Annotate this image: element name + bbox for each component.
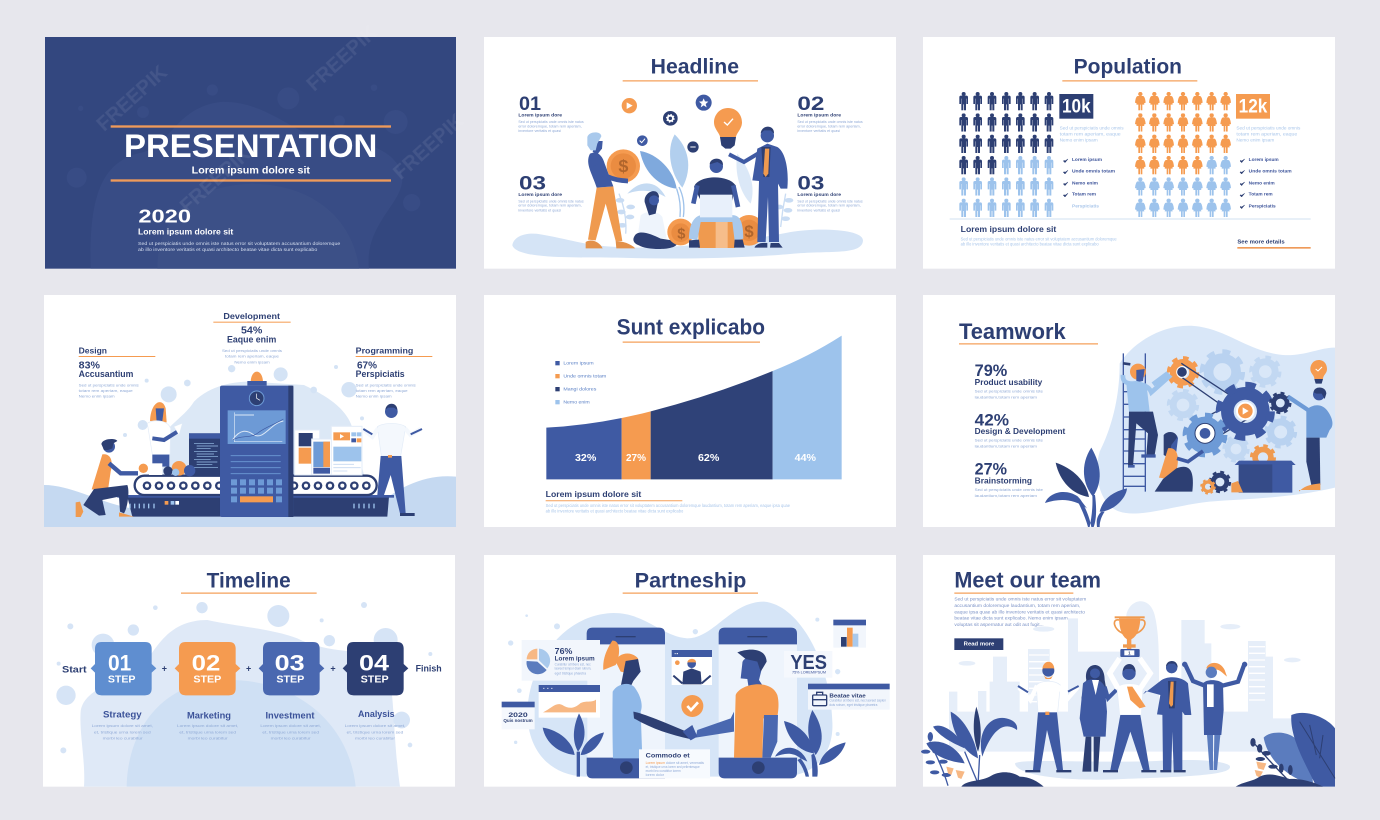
figure: man	[683, 650, 779, 758]
checklist right: Unde omnis totam	[1249, 169, 1292, 174]
icon: coins: $	[744, 222, 754, 241]
figure: man raising trophy	[1103, 658, 1156, 772]
illustration: plants	[543, 710, 846, 777]
checklist left	[1063, 157, 1115, 208]
panel: population	[923, 37, 1335, 269]
step 01	[91, 642, 156, 695]
stat: 10k: Sed ut perspiciatis unde omnis	[1060, 126, 1124, 131]
watermarks: FREEPIK	[93, 61, 172, 136]
card: yes: 75% LOREMIPSUM	[792, 671, 826, 675]
cover title block	[111, 125, 391, 182]
card: commodo et: Lorem ipsum dolore sit amet, venenatis	[646, 760, 704, 765]
label: design: Sed ut perspiciatis unde omnis	[79, 383, 139, 388]
item 03 left: 03	[519, 173, 546, 194]
stat: brainstorming: Sed ut perspiciatis unde omnis iste	[975, 487, 1044, 492]
item 02: error doloremque, totam rem aperiam,	[797, 123, 861, 128]
label: development: Sed ut perspiciatis unde omnis	[222, 348, 282, 353]
label: development: totam rem aperiam, eaque	[225, 353, 280, 358]
item 03 right: Lorem ipsum dore	[797, 192, 841, 198]
figure: woman with tablet	[147, 402, 182, 454]
item 01: error doloremque, totam rem aperiam,	[518, 123, 582, 128]
heading	[623, 55, 758, 82]
checklist left: Totam rem	[1072, 192, 1096, 197]
card: pie stat: eget tristique pharetra	[555, 670, 587, 675]
icon grid: 10k men	[959, 92, 1053, 217]
label: programming	[356, 345, 432, 399]
link: see more details: See more details	[1237, 240, 1285, 246]
checklist right	[1240, 157, 1292, 209]
card: beatae vitae	[808, 684, 890, 710]
heading: Population	[1074, 55, 1182, 79]
watermarks: FREEPIK	[389, 109, 469, 184]
legend	[555, 361, 607, 404]
background blob	[1097, 326, 1335, 514]
cover date text: ab illo inventore veritatis et quasi architecto beatae vitae dicta sunt explicabo	[138, 247, 318, 252]
step text: marketing	[177, 710, 238, 741]
card: commodo et: Commodo et	[646, 753, 691, 760]
start and finish labels: +	[162, 664, 167, 674]
legend: Mangi dolores	[563, 387, 596, 392]
icon: check badge	[681, 695, 703, 717]
item 02: Lorem ipsum dore	[797, 113, 841, 119]
item 03 left	[518, 173, 584, 212]
item 03 left: Sed ut perspiciatis unde omnis iste natus	[518, 198, 584, 203]
checklist left: Perspiciatis	[1072, 203, 1100, 208]
card: pie stat: 76%	[555, 647, 572, 656]
start and finish labels: Finish	[416, 663, 442, 673]
item 03 right: 03	[797, 173, 825, 194]
card: pie stat: laoreet tempor diam rutrum,	[555, 666, 591, 671]
illustration: left plants	[921, 707, 1044, 787]
step text: investment: et, tristique urna lorem sed	[262, 729, 319, 734]
label: design: Design	[79, 345, 107, 355]
cover title block: PRESENTATION	[124, 127, 377, 164]
label: programming: Perspiciatis	[356, 369, 405, 379]
footer text: Lorem ipsum dolore sit	[961, 224, 1056, 234]
item 03 left: error doloremque, totam rem aperiam,	[518, 203, 582, 208]
icon: light bulb	[714, 108, 742, 149]
item 02: Sed ut perspiciatis unde omnis iste natus	[797, 119, 863, 124]
checklist left: Nemo enim	[1072, 180, 1098, 185]
stat: 12k: Nemo enim ipsam	[1236, 137, 1275, 142]
footer text: ab illo inventore veritatis et quasi architecto beatae vitae dicta sunt explicabo	[961, 241, 1099, 246]
footer text	[961, 224, 1117, 246]
figure: man in suit	[1143, 661, 1191, 772]
stat: 12k: totam rem aperiam, eaque	[1236, 131, 1298, 136]
stat: 10k: totam rem aperiam, eaque	[1060, 131, 1121, 136]
footer text: Lorem ipsum dolore sit	[546, 489, 641, 499]
heading: Partneship	[635, 568, 746, 592]
button: read more: Read more	[964, 642, 994, 648]
stat: brainstorming: laudantium,totam rem aperiam	[975, 493, 1038, 498]
card: commodo et: morbi leo curabitur lorem	[646, 768, 681, 773]
label: development: 54%	[241, 326, 263, 337]
step 04: STEP	[361, 674, 389, 685]
step text: marketing: morbi leo curabitur	[188, 736, 228, 741]
figure: man with bulb	[1288, 360, 1332, 492]
item 03 right: Sed ut perspiciatis unde omnis iste natus	[797, 198, 863, 203]
figure: man in suit	[729, 127, 788, 248]
area chart	[546, 336, 842, 479]
illustration: right plants	[1236, 713, 1335, 787]
label: programming: totam rem aperiam, eaque	[356, 388, 409, 393]
cover date text: 2020	[138, 206, 191, 227]
panel: partnership	[484, 555, 896, 787]
item 03 left: inventore veritatis et quasi	[518, 207, 561, 212]
figure: kneeling man	[76, 439, 138, 517]
checklist left: Lorem ipsum	[1072, 157, 1102, 162]
item 02	[797, 94, 863, 133]
step text: analysis: et, tristique urna lorem sed	[347, 729, 403, 734]
illustration: left phone	[587, 628, 665, 778]
panel: development machine	[44, 295, 456, 527]
button: read more	[954, 638, 1003, 650]
start and finish labels	[62, 663, 442, 674]
figure: man on ladder	[1123, 363, 1169, 468]
card: area chart	[539, 685, 600, 718]
background blob	[508, 602, 840, 777]
label: development: Development	[223, 311, 280, 321]
step text: strategy: morbi leo curabitur	[103, 736, 143, 741]
start and finish labels: Start	[62, 664, 87, 674]
item 02: 02	[797, 94, 824, 115]
step 03	[259, 642, 324, 695]
heading: Meet our team	[954, 567, 1101, 592]
card: video call	[672, 650, 712, 685]
item 01: Lorem ipsum dore	[518, 113, 562, 119]
illustration: team with coins	[512, 95, 863, 258]
card: 2020: 2020	[508, 712, 528, 719]
illustration: machine	[220, 372, 293, 517]
card: bar chart	[833, 620, 866, 648]
card: yes	[784, 651, 832, 678]
step 03: 03	[275, 651, 305, 676]
step text: strategy	[92, 709, 153, 741]
figure: woman cheering	[1182, 662, 1247, 770]
stat: 10k: 10k	[1062, 96, 1091, 117]
area chart: 62%	[698, 453, 719, 464]
item 03 right	[797, 173, 863, 212]
step 02	[175, 642, 240, 695]
illustration: conveyor	[117, 476, 394, 517]
panel: timeline	[43, 555, 455, 787]
item 01: inventore veritatis et quasi	[518, 128, 561, 133]
label: programming: 67%	[357, 360, 377, 371]
label: programming: Sed ut perspiciatis unde omnis	[356, 383, 416, 388]
panel: presentation cover	[45, 21, 469, 269]
panel: teamwork	[923, 295, 1335, 527]
stat: product usability: Sed ut perspiciatis unde omnis iste	[975, 388, 1044, 393]
step 01: 01	[108, 651, 131, 676]
step 03: STEP	[276, 674, 304, 685]
step text: investment: Lorem ipsum dolore sit amet,	[260, 723, 321, 728]
stat: product usability: Product usability	[975, 377, 1043, 387]
card: beatae vitae: duis rutrum, eget tristique pharetra	[829, 702, 878, 707]
intro paragraph: beatae vitae dicta sunt explicabo. Nemo enim ipsam	[954, 616, 1068, 621]
figure: man with laptop	[689, 159, 745, 248]
step 04: 04	[359, 651, 390, 676]
step 04	[343, 642, 408, 695]
item 03 right: inventore veritatis et quasi	[797, 207, 840, 212]
item 01: 01	[519, 94, 541, 115]
card: 2020: Quis nostrum	[503, 718, 533, 723]
label: programming: Programming	[356, 345, 413, 355]
item 03 right: error doloremque, totam rem aperiam,	[797, 203, 861, 208]
label: development: Nemo enim ipsam	[234, 359, 270, 364]
step text: marketing: et, tristique urna lorem sed	[179, 729, 236, 734]
item 01: Sed ut perspiciatis unde omnis iste natus	[518, 119, 584, 124]
stat: brainstorming: 27%	[975, 459, 1007, 478]
intro paragraph: eaque ipsa quae ab illo inventore veritatis et quasi architecto	[954, 609, 1085, 614]
card: pie stat: Curabitur at libero est, nec	[555, 662, 591, 667]
intro paragraph: voluptas sit aspernatur aut odit aut fugit...	[954, 622, 1044, 627]
stat: 10k: Nemo enim ipsam	[1060, 137, 1098, 142]
footer text	[546, 489, 791, 513]
card: yes: YES	[790, 652, 827, 674]
stat: brainstorming	[975, 459, 1044, 498]
step 02: 02	[192, 651, 220, 676]
heading: Sunt explicabo	[617, 314, 765, 339]
step text: investment: Investment	[265, 710, 314, 720]
area chart: 32%	[575, 453, 596, 464]
stat: design and development: Design & Development	[975, 426, 1066, 436]
heading: Timeline	[207, 568, 291, 592]
checklist left: Unde omnis totam	[1072, 169, 1115, 174]
illustration: gears	[1169, 353, 1295, 493]
heading: Headline	[651, 55, 739, 79]
stat: product usability: laudantium,totam rem aperiam	[975, 394, 1038, 399]
illustration: code window	[139, 433, 220, 476]
figure: woman in dark suit	[1080, 665, 1116, 772]
stat: design and development: 42%	[975, 410, 1009, 429]
heading	[181, 568, 317, 594]
step text: analysis: Lorem ipsum dolore sit amet,	[345, 723, 405, 728]
label: programming: Nemo enim ipsam	[356, 394, 392, 399]
figure: seated woman	[633, 191, 677, 249]
figure: man holding coin	[586, 132, 640, 248]
card: beatae vitae: Curabitur at libero est, nec laoreet sapien	[829, 698, 886, 703]
step text: strategy: Strategy	[103, 709, 142, 719]
step text: analysis	[345, 709, 405, 741]
icon grid: 12k women	[1135, 92, 1231, 217]
step text: analysis: morbi leo curabitur	[355, 736, 396, 741]
illustration: ladder	[1123, 353, 1145, 492]
intro paragraph: Sed ut perspiciatis unde omnis iste natus error sit voluptatem	[954, 597, 1086, 602]
legend: Nemo enim	[563, 399, 590, 404]
link: see more details	[1237, 240, 1311, 249]
illustration: right phone	[719, 628, 797, 778]
icon: floating badges	[622, 95, 712, 153]
icon: coins: $	[677, 226, 685, 242]
cover date text: Lorem ipsum dolore sit	[138, 227, 234, 236]
icon: trophy: 1	[1128, 650, 1131, 655]
background blobs	[67, 84, 420, 269]
footer text: ab illo inventore veritatis et quasi architecto beatae vitae dicta sunt explicabo	[546, 508, 684, 513]
card: commodo et: lorem dolor	[646, 772, 665, 777]
stat: 12k	[1236, 94, 1300, 142]
step text: marketing: Marketing	[187, 710, 231, 720]
panel: meet our team	[921, 555, 1335, 787]
card: commodo et	[639, 749, 710, 778]
intro paragraph: accusantium doloremque laudantium, totam rem aperiam,	[954, 603, 1080, 608]
checklist right: Lorem ipsum	[1249, 157, 1279, 162]
background blobs	[56, 602, 432, 787]
card: 2020	[502, 702, 535, 729]
icon: coins	[667, 215, 764, 246]
label: development: Eaque enim	[227, 335, 276, 345]
icon: trophy	[1114, 616, 1145, 657]
heading: Teamwork	[959, 319, 1066, 344]
step text: strategy: et, tristique urna lorem sed	[94, 729, 151, 734]
checklist right: Perspiciatis	[1249, 203, 1276, 208]
stat: 12k: Sed ut perspiciatis unde omnis	[1236, 126, 1300, 131]
cover title block: Lorem ipsum dolore sit	[192, 166, 311, 177]
card: pie stat	[522, 640, 600, 681]
step 02: STEP	[193, 674, 221, 685]
label: design: totam rem aperiam, eaque	[79, 388, 134, 393]
illustration: output documents	[295, 426, 362, 475]
card: commodo et: et, tristique urna lorem sed pellentesque	[646, 764, 700, 769]
footer text: Sed ut perspiciatis unde omnis iste natus error sit voluptatem accusantium doloremque	[961, 236, 1117, 241]
card: beatae vitae: Beatae vitae	[829, 693, 866, 699]
watermarks: FREEPIK	[303, 21, 382, 96]
figure: kneeling woman	[1155, 432, 1203, 492]
panel: headline	[484, 37, 896, 269]
skyline background	[949, 601, 1321, 780]
step text: analysis: Analysis	[358, 709, 395, 719]
step text: marketing: Lorem ipsum dolore sit amet,	[177, 723, 238, 728]
stat: design and development: Sed ut perspiciatis unde omnis iste	[975, 438, 1044, 443]
figure: man in white shirt	[1018, 662, 1079, 772]
stat: 10k	[1059, 94, 1124, 142]
area chart: 27%	[626, 453, 646, 464]
step 01: STEP	[108, 674, 136, 685]
label: development	[213, 311, 291, 364]
step text: investment	[260, 710, 321, 741]
checklist right: Nemo enim	[1249, 180, 1275, 185]
label: design: Nemo enim ipsam	[79, 394, 115, 399]
stat: design and development	[975, 410, 1066, 449]
legend: Unde omnis totam	[563, 374, 607, 379]
illustration: plant	[1045, 448, 1127, 527]
area chart: 44%	[795, 453, 816, 464]
label: design: Accusantium	[79, 369, 133, 379]
stat: product usability	[975, 361, 1044, 399]
label: design	[79, 345, 155, 399]
illustration: open box	[1231, 461, 1296, 493]
intro paragraph	[954, 597, 1086, 627]
stat: product usability: 79%	[975, 361, 1008, 380]
item 03 left: Lorem ipsum dore	[518, 192, 562, 198]
item 01	[518, 94, 584, 133]
cover date text	[138, 206, 341, 252]
card: pie stat: Lorem ipsum	[555, 655, 595, 662]
figure: man holding coin: $	[618, 156, 628, 176]
stat: design and development: laudantium,totam rem aperiam	[975, 444, 1038, 449]
stat: 12k: 12k	[1239, 96, 1268, 117]
start and finish labels: +	[246, 664, 251, 674]
stat: brainstorming: Brainstorming	[975, 475, 1032, 485]
background shapes	[44, 365, 456, 527]
footer text: Sed ut perspiciatis unde omnis iste natus error sit voluptatem accusantium doloremque laudantium, totam rem aperiam, eaque ipsa quae	[546, 503, 791, 508]
watermarks: FREEPIK	[176, 143, 255, 217]
step text: strategy: Lorem ipsum dolore sit amet,	[92, 723, 153, 728]
checklist right: Totam rem	[1249, 192, 1273, 197]
legend: Lorem ipsum	[563, 361, 594, 366]
figure: woman	[603, 641, 691, 758]
step text: investment: morbi leo curabitur	[271, 736, 311, 741]
figure: standing man	[363, 404, 422, 516]
panel: sunt explicabo chart	[484, 295, 896, 527]
watermarks	[93, 21, 469, 217]
label: design: 83%	[79, 360, 100, 371]
start and finish labels: +	[330, 664, 336, 674]
item 02: inventore veritatis et quasi	[797, 128, 840, 133]
cover date text: Sed ut perspiciatis unde omnis iste natus error sit voluptatem accusantium doloremque	[138, 241, 341, 246]
